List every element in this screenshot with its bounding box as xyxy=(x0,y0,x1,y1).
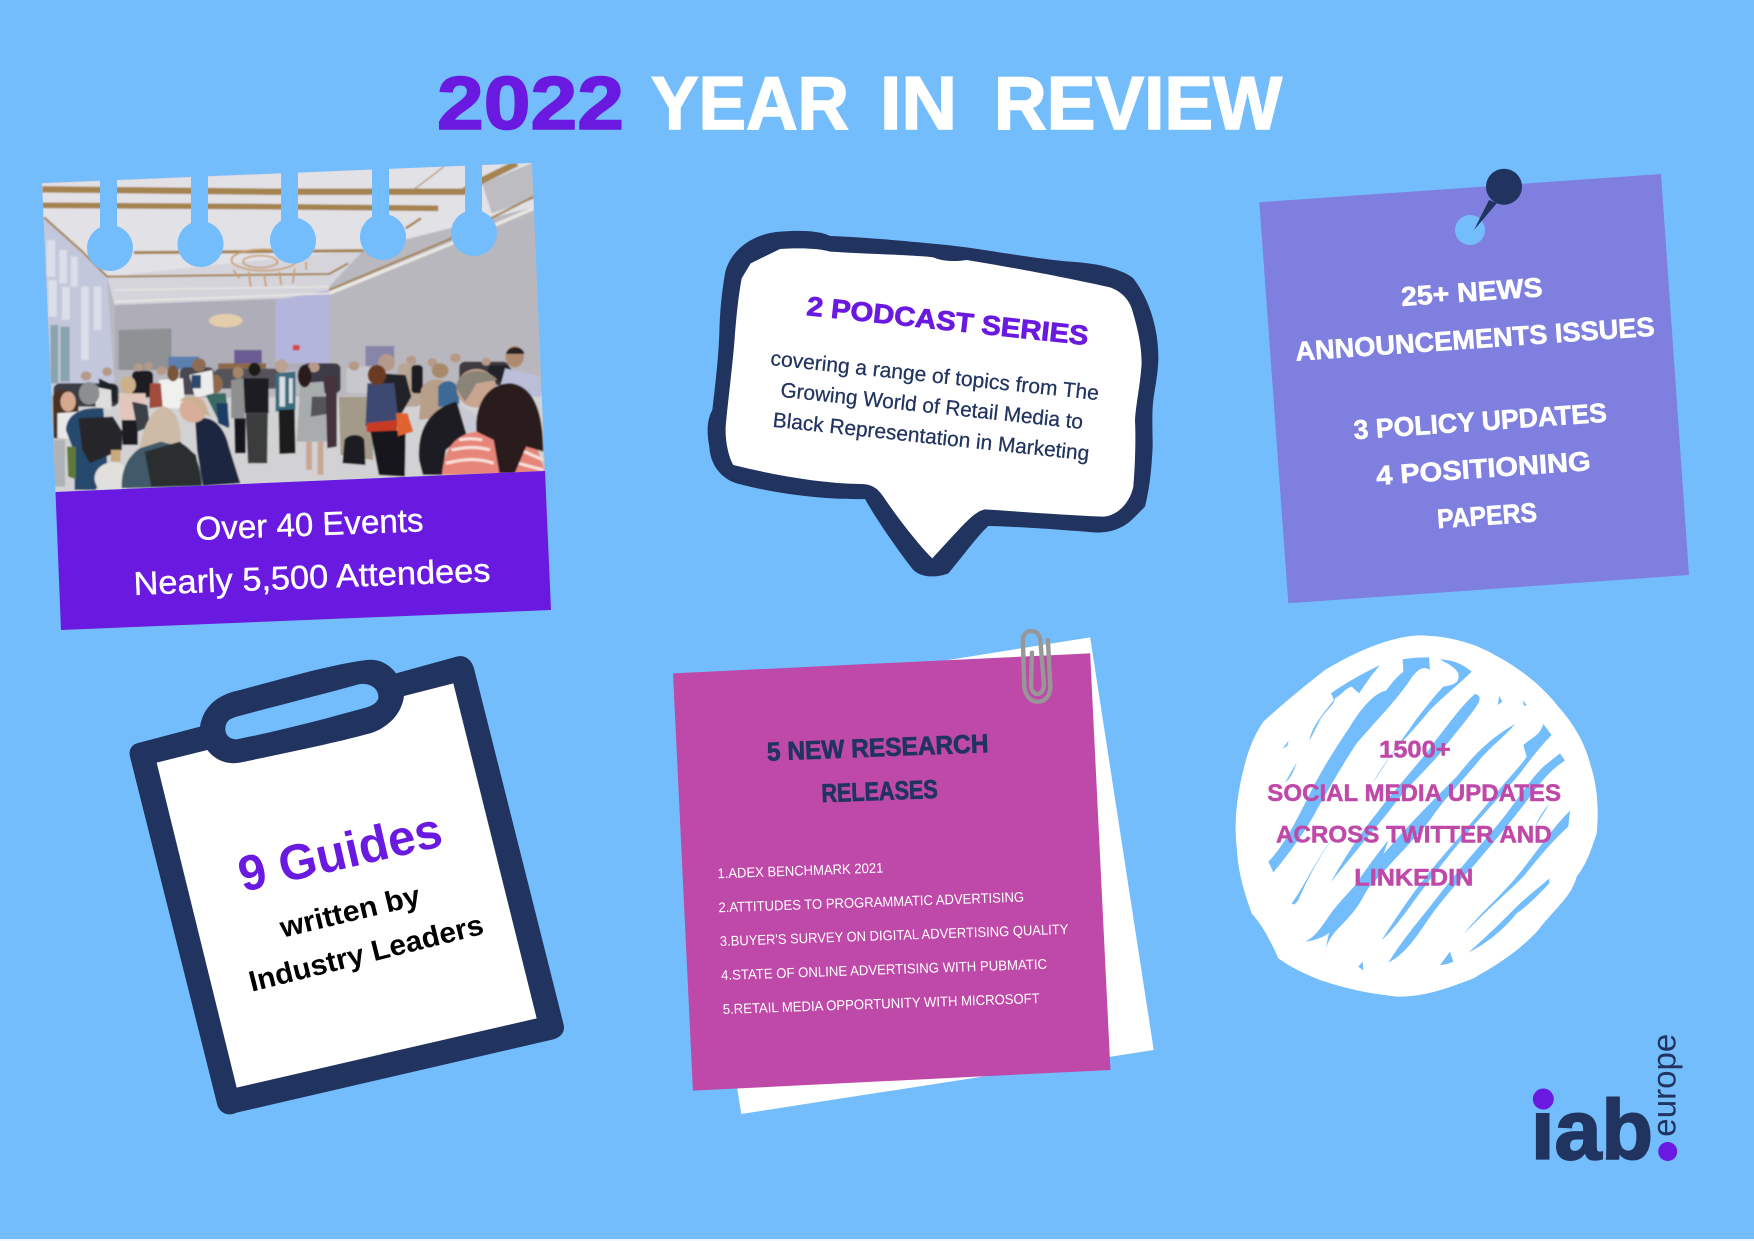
title: YEAR xyxy=(651,61,849,145)
blue jacket and beige coat xyxy=(418,378,444,420)
man grey jacket xyxy=(231,378,245,418)
title xyxy=(437,61,1282,145)
description xyxy=(769,347,1100,465)
description: Growing World of Retail Media to xyxy=(779,379,1084,434)
clipboard shape xyxy=(130,656,564,1114)
grey dress woman xyxy=(297,382,330,442)
caption text: Nearly 5,500 Attendees xyxy=(133,551,491,602)
panel: events photo card xyxy=(34,157,551,630)
pink top woman xyxy=(119,393,147,420)
heading: RELEASES xyxy=(821,774,938,808)
striped shirt woman xyxy=(442,432,545,475)
woman teal xyxy=(205,393,230,427)
social text: ACROSS TWITTER AND xyxy=(1276,822,1552,849)
heading: 2 PODCAST SERIES xyxy=(805,291,1090,351)
woman navy dress xyxy=(195,418,240,486)
logo: iab europe: europe xyxy=(1646,1034,1683,1137)
title: IN xyxy=(880,61,957,145)
dark standing man left xyxy=(99,378,117,403)
man patterned shirt xyxy=(276,372,295,412)
floor xyxy=(54,393,543,497)
note text: 25+ NEWS xyxy=(1400,272,1543,312)
description: covering a range of topics from The xyxy=(769,347,1100,405)
paper stack xyxy=(673,637,1154,1114)
research list: 3.BUYER'S SURVEY ON DIGITAL ADVERTISING QUALITY xyxy=(720,921,1069,949)
round table xyxy=(339,397,373,460)
photo: conference crowd xyxy=(34,157,551,500)
title: 2022 xyxy=(437,61,624,145)
panel: clipboard guides xyxy=(130,656,564,1114)
note text: 4 POSITIONING xyxy=(1375,446,1592,491)
note text: ANNOUNCEMENTS ISSUES xyxy=(1294,312,1656,367)
heading xyxy=(766,728,989,808)
description: Black Representation in Marketing xyxy=(772,409,1090,465)
note paper xyxy=(1259,174,1689,603)
far crowd xyxy=(54,362,511,407)
man blue shirt with backpack xyxy=(66,408,107,490)
subtext: written by xyxy=(276,880,423,945)
panel: social media scribble circle xyxy=(1236,635,1598,997)
icon: pin xyxy=(1455,169,1522,245)
woman left xyxy=(53,390,78,440)
heading: 5 NEW RESEARCH xyxy=(766,728,989,767)
icon: paperclip xyxy=(1023,631,1050,702)
panel: podcast speech bubble xyxy=(708,231,1158,576)
social text: LINKEDIN xyxy=(1354,865,1473,892)
logo: iab europe xyxy=(1531,1034,1683,1177)
man black jacket xyxy=(419,402,473,475)
bubble shape xyxy=(708,231,1158,576)
man navy suit xyxy=(381,373,411,413)
binder holes xyxy=(87,164,497,271)
caption text: Over 40 Events xyxy=(195,501,424,547)
caption text xyxy=(133,501,491,602)
research list: 2.ATTITUDES TO PROGRAMMATIC ADVERTISING xyxy=(718,889,1024,915)
social text: 1500+ xyxy=(1379,737,1451,764)
white top woman xyxy=(159,378,185,408)
research list: 5.RETAIL MEDIA OPPORTUNITY WITH MICROSOFT xyxy=(723,990,1040,1017)
panel: pinned news note xyxy=(1259,169,1689,603)
research list: 4.STATE OF ONLINE ADVERTISING WITH PUBMATIC xyxy=(721,956,1047,983)
note text: PAPERS xyxy=(1436,497,1538,534)
research list: 1.ADEX BENCHMARK 2021 xyxy=(717,860,884,881)
panel: research note xyxy=(673,631,1154,1114)
note text xyxy=(1294,272,1656,534)
subtext: Industry Leaders xyxy=(246,909,487,998)
logo: iab europe: iab xyxy=(1531,1083,1653,1177)
woman patterned top xyxy=(365,383,399,427)
heading: 9 Guides xyxy=(233,802,447,903)
social text xyxy=(1267,737,1561,892)
blonde woman with backpack xyxy=(122,440,202,488)
title: REVIEW xyxy=(994,61,1282,145)
banners xyxy=(168,357,199,369)
social text: SOCIAL MEDIA UPDATES xyxy=(1267,780,1561,807)
right man xyxy=(498,368,542,397)
caption band xyxy=(56,471,551,630)
white round table xyxy=(93,462,126,490)
note text: 3 POLICY UPDATES xyxy=(1353,398,1608,445)
man black tee xyxy=(243,378,269,413)
man white shirt xyxy=(189,370,214,398)
research list xyxy=(717,860,1069,1017)
scribble circle xyxy=(1236,635,1598,997)
